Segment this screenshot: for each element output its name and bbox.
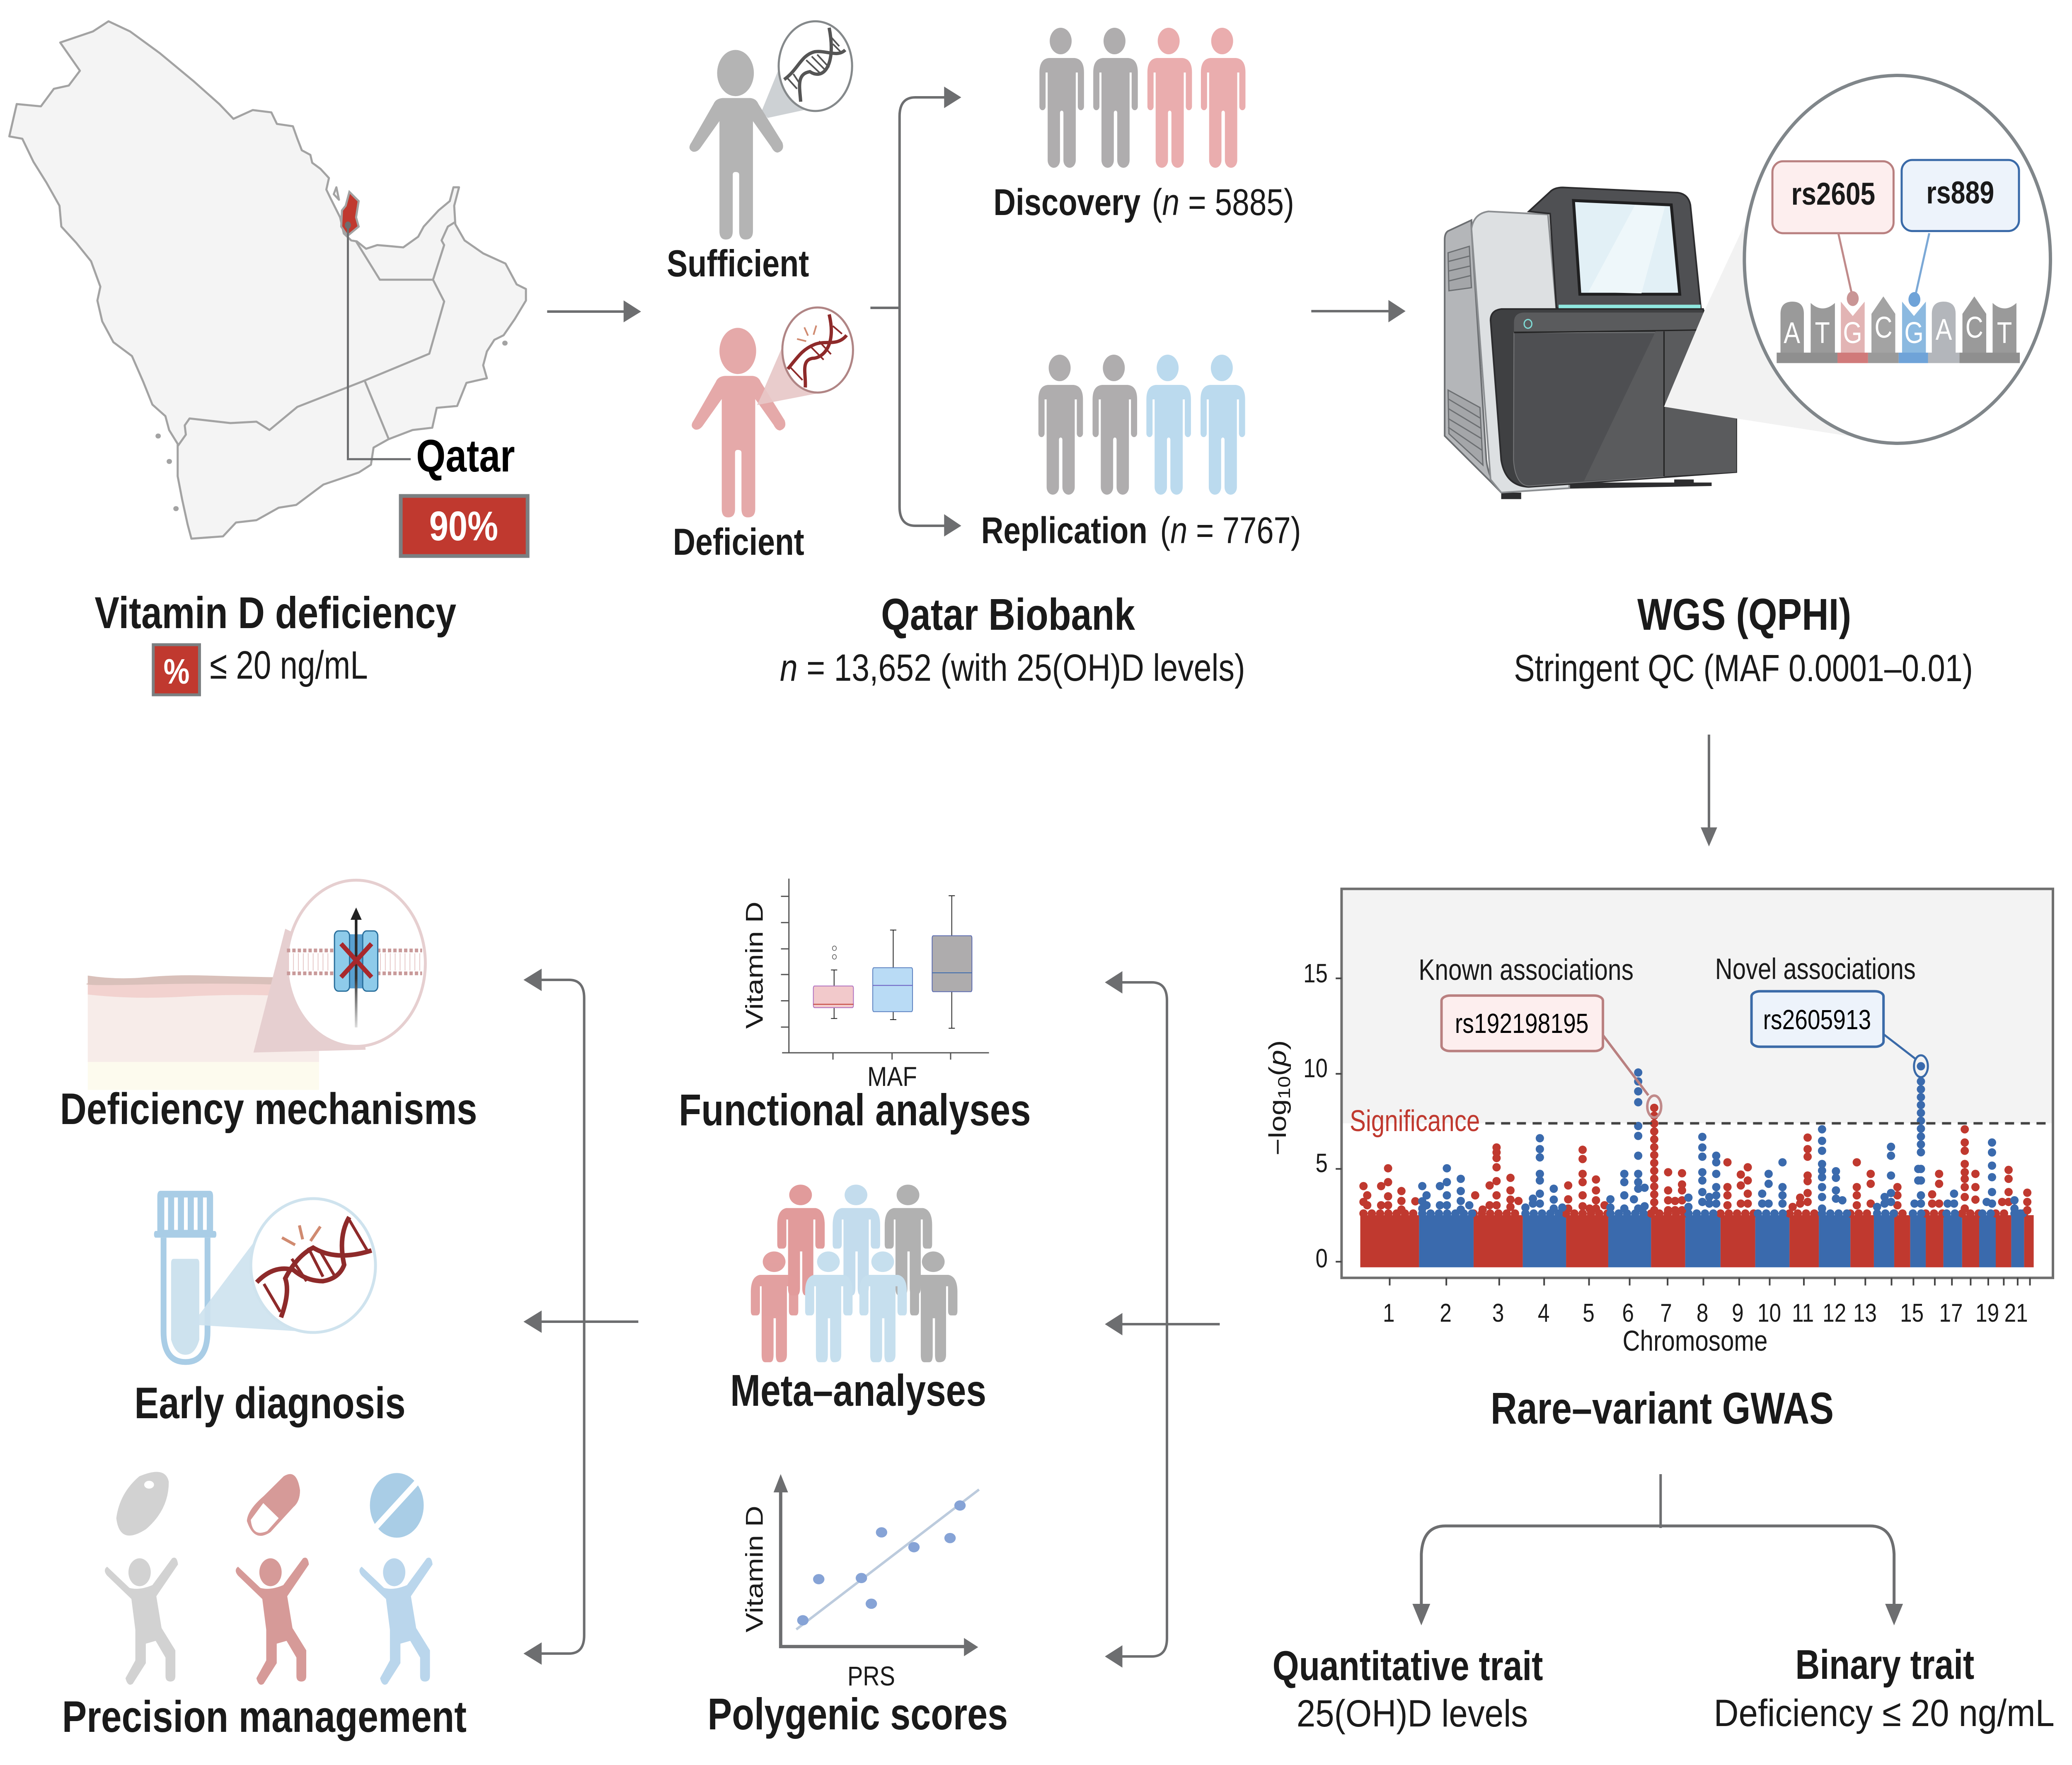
chromosome labels xyxy=(1383,1298,2028,1327)
panel: clinical outcomes xyxy=(60,880,477,1741)
nucleotide letters xyxy=(1784,311,2012,350)
arrow: biobank to WGS xyxy=(1311,300,1406,322)
icon: red capsule and person xyxy=(236,1474,309,1685)
label: rs2605: rs2605 xyxy=(1791,176,1875,211)
chromosome labels: 3 xyxy=(1492,1298,1504,1327)
axis label: Vitamin D: Vitamin D xyxy=(741,1506,768,1632)
chromosome labels: 12 xyxy=(1823,1298,1846,1327)
block: binary trait xyxy=(1714,1642,2055,1734)
heading: Functional analyses: Functional analyses xyxy=(679,1085,1031,1135)
arrow: map to biobank xyxy=(547,300,641,322)
nucleotide letters: A xyxy=(1784,317,1800,350)
panel: WGS xyxy=(1445,75,2050,689)
badge: 90%: 90% xyxy=(429,503,498,549)
nucleotide letters: A xyxy=(1936,313,1952,346)
axis tick labels: 0 xyxy=(1316,1244,1328,1273)
chromosome labels: 2 xyxy=(1440,1298,1452,1327)
icon: sequencing machine xyxy=(1445,187,1736,499)
subheading: stringent QC: Stringent QC (MAF 0.0001–0.01) xyxy=(1514,647,1973,689)
panel: Manhattan plot xyxy=(1264,889,2053,1434)
chromosome labels: 15 xyxy=(1900,1298,1924,1327)
y-axis title: ( xyxy=(1264,1066,1291,1076)
icon: skin section with membrane channel xyxy=(86,880,425,1090)
legend: percent threshold: % xyxy=(164,652,189,691)
chromosome labels: 17 xyxy=(1939,1298,1963,1327)
nucleotide letters: G xyxy=(1843,317,1862,350)
heading: Meta–analyses: Meta–analyses xyxy=(730,1366,986,1416)
nucleotide letters: T xyxy=(1997,317,2012,350)
panel: Qatar Biobank xyxy=(667,21,1301,689)
nucleotide letters: T xyxy=(1815,317,1830,350)
icon: test tube with damaged DNA xyxy=(154,1191,375,1362)
chromosome labels: 1 xyxy=(1383,1298,1395,1327)
heading: WGS (QPHI): WGS (QPHI) xyxy=(1637,590,1851,640)
block: binary trait: Binary trait xyxy=(1795,1642,1974,1688)
heading: Qatar Biobank: Qatar Biobank xyxy=(881,590,1135,640)
legend: percent threshold xyxy=(153,643,368,695)
label: Discovery xyxy=(993,181,1294,223)
chromosome labels: 6 xyxy=(1622,1298,1634,1327)
y-axis title: −log xyxy=(1264,1099,1291,1156)
icon: blue tablet and person xyxy=(359,1473,433,1685)
bracket arrow: analyses to outcomes xyxy=(523,969,638,1665)
block: quantitative trait: Quantitative trait xyxy=(1273,1643,1543,1689)
block: quantitative trait xyxy=(1273,1643,1543,1735)
chromosome labels: 8 xyxy=(1697,1298,1708,1327)
subheading: sample size: n = 13,652 (with 25(OH)D levels) xyxy=(780,646,1245,689)
heading: Vitamin D deficiency: Vitamin D deficiency xyxy=(94,588,456,638)
chromosome labels: 10 xyxy=(1757,1298,1781,1327)
label: Known associations: Known associations xyxy=(1418,953,1634,986)
nucleotide letters: C xyxy=(1965,311,1983,344)
y-axis title: p) xyxy=(1264,1040,1291,1066)
axis tick labels xyxy=(1303,959,1328,1273)
bracket arrow: split to discovery and replication xyxy=(870,87,961,537)
chromosome labels: 13 xyxy=(1853,1298,1877,1327)
map of Arabian Peninsula xyxy=(9,21,526,539)
chromosome labels: 11 xyxy=(1792,1298,1814,1327)
label: rs889: rs889 xyxy=(1926,175,1994,210)
bracket arrow: GWAS to analyses xyxy=(1105,971,1220,1668)
arrow fork: GWAS to traits xyxy=(1412,1474,1903,1625)
chromosome labels: 9 xyxy=(1732,1298,1744,1327)
icon: discovery cohort xyxy=(1039,28,1245,168)
chromosome labels: 5 xyxy=(1583,1298,1595,1327)
heading: Polygenic scores: Polygenic scores xyxy=(707,1689,1008,1739)
chart: PRS scatter xyxy=(774,1474,979,1656)
axis tick labels: 10 xyxy=(1303,1054,1328,1083)
axis label: PRS: PRS xyxy=(847,1661,895,1691)
label: Sufficient: Sufficient xyxy=(667,242,809,285)
x-axis title: Chromosome xyxy=(1622,1325,1767,1357)
heading: Precision management: Precision management xyxy=(62,1692,467,1741)
panel: follow-up analyses xyxy=(679,879,1031,1739)
chart: Manhattan plot xyxy=(1336,889,2053,1286)
chromosome labels: 4 xyxy=(1538,1298,1549,1327)
axis label: Vitamin D: Vitamin D xyxy=(741,902,768,1029)
label: Novel associations: Novel associations xyxy=(1715,953,1916,985)
y-axis title: 10 xyxy=(1274,1076,1294,1099)
label: Replication: Replication xyxy=(981,509,1147,551)
label: Qatar: Qatar xyxy=(416,431,515,481)
chromosome labels: 21 xyxy=(2004,1298,2028,1327)
icon: deficient person with damaged DNA xyxy=(692,307,853,517)
block: binary trait: Deficiency ≤ 20 ng/mL xyxy=(1714,1692,2055,1734)
panel: vitamin D deficiency map xyxy=(9,21,528,695)
heading: Early diagnosis: Early diagnosis xyxy=(134,1378,406,1428)
icon: group of people xyxy=(751,1185,957,1362)
chart: box plot xyxy=(781,879,989,1059)
badge: 90% xyxy=(401,496,528,556)
chromosome labels: 7 xyxy=(1660,1298,1672,1327)
block: quantitative trait: 25(OH)D levels xyxy=(1297,1692,1528,1735)
axis tick labels: 5 xyxy=(1316,1148,1328,1178)
Qatar highlight and pointer xyxy=(341,192,411,459)
icon: sufficient person with DNA xyxy=(690,21,852,239)
nucleotide letters: G xyxy=(1904,317,1924,350)
label: rs192198195: rs192198195 xyxy=(1455,1008,1589,1039)
axis label: MAF: MAF xyxy=(867,1061,917,1092)
label: Significance: Significance xyxy=(1350,1105,1480,1138)
arrow: WGS to GWAS xyxy=(1701,735,1717,846)
label: Deficient: Deficient xyxy=(673,520,804,563)
heading: Deficiency mechanisms: Deficiency mechanisms xyxy=(60,1084,477,1134)
label: rs2605913: rs2605913 xyxy=(1763,1004,1871,1035)
icon: grey pill and person xyxy=(105,1472,178,1685)
legend: percent threshold: ≤ 20 ng/mL xyxy=(210,643,368,687)
callout: zoom on variants xyxy=(1664,75,2050,443)
label: Discovery: Discovery xyxy=(993,181,1140,223)
label: Replication xyxy=(981,509,1301,551)
heading: Rare–variant GWAS: Rare–variant GWAS xyxy=(1491,1383,1834,1434)
nucleotide letters: C xyxy=(1874,311,1893,344)
label: Replication: (n = 7767) xyxy=(1160,509,1301,551)
label: Discovery: (n = 5885) xyxy=(1152,181,1294,223)
chromosome labels: 19 xyxy=(1975,1298,1999,1327)
icon: replication cohort xyxy=(1038,355,1245,495)
axis tick labels: 15 xyxy=(1303,959,1328,988)
